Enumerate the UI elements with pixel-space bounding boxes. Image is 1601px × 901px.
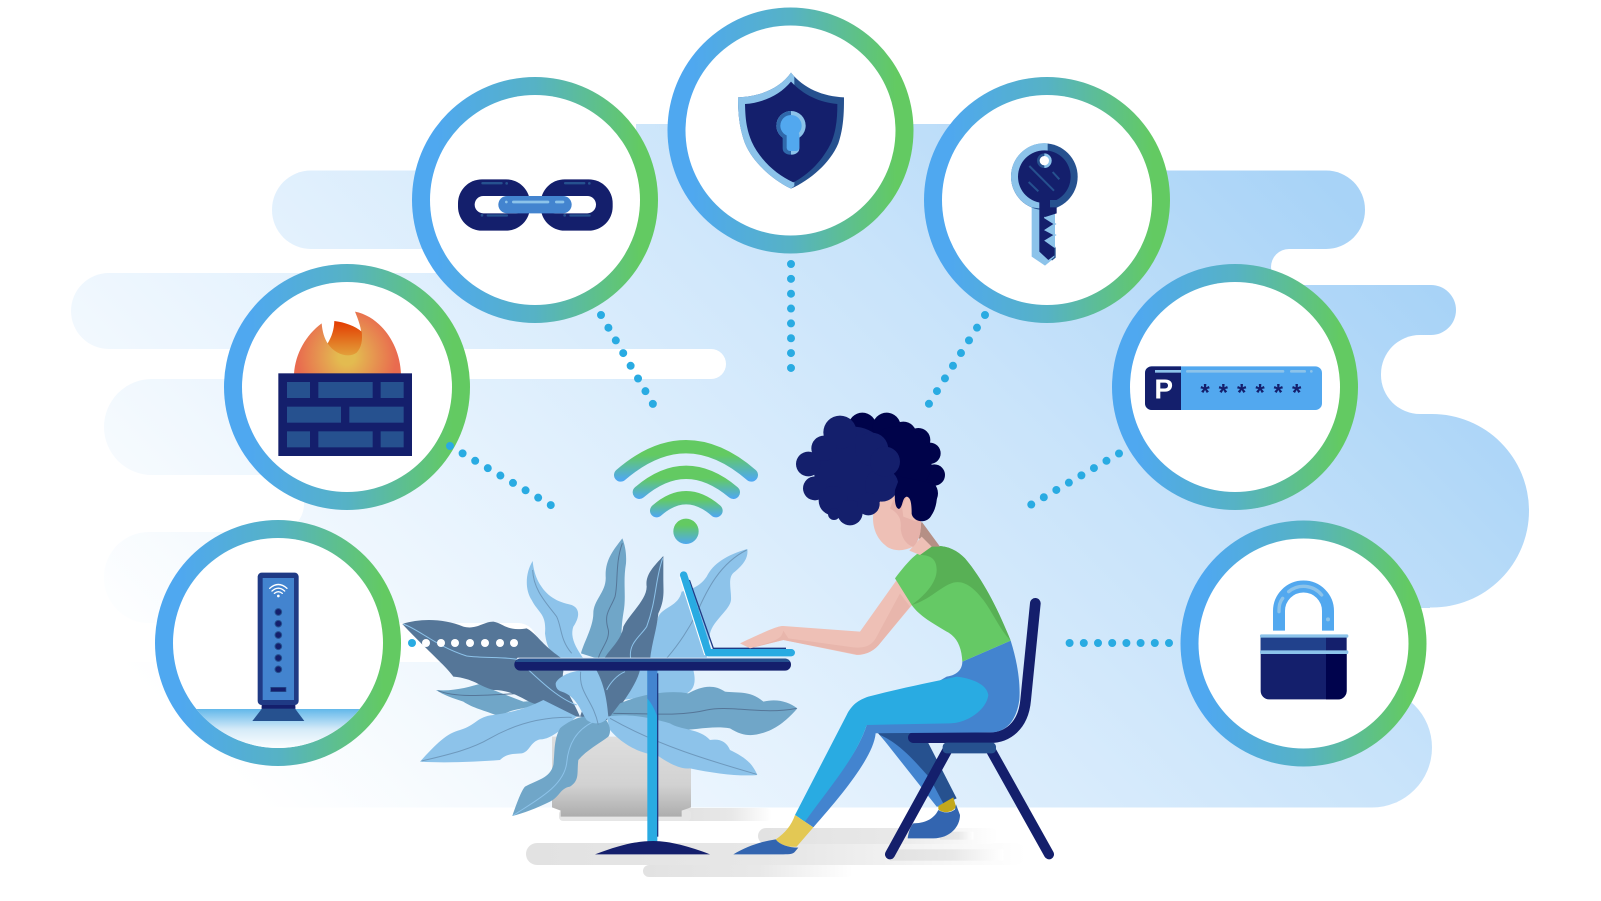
- circle: chain link: [412, 77, 658, 323]
- icon: shield with keyhole: [738, 73, 844, 189]
- icon: key: [1011, 143, 1078, 266]
- dotted connector lines: [450, 264, 1169, 643]
- arm: [740, 580, 913, 655]
- hair back: [848, 413, 945, 507]
- icon: password field: *: [1255, 380, 1265, 407]
- circle: router: [155, 520, 401, 766]
- circle: padlock: [1180, 520, 1426, 766]
- icon: password field: *: [1237, 380, 1247, 407]
- plant leaves: [402, 538, 797, 816]
- circle: password: [1112, 264, 1358, 510]
- icon: password field: *: [1292, 380, 1302, 407]
- table: [514, 658, 791, 854]
- wifi symbol: [621, 447, 751, 544]
- chair: [890, 603, 1049, 854]
- icon: router: [252, 573, 304, 721]
- face: [873, 493, 921, 550]
- router connector dots: [408, 639, 518, 647]
- icon: password field: [1145, 366, 1322, 410]
- circle: firewall: [224, 264, 470, 510]
- laptop: [680, 575, 791, 655]
- icon: flames over brick wall: [278, 312, 412, 456]
- plant pot: [552, 737, 691, 817]
- back leg: [877, 732, 960, 838]
- floor shadows: [526, 808, 1026, 877]
- hips: [867, 641, 1020, 733]
- person at chair: [733, 413, 1049, 861]
- chair shadows: [890, 832, 1003, 861]
- icon: chain link: [458, 179, 613, 231]
- shirt: [895, 546, 1011, 662]
- icon: password field: *: [1219, 380, 1229, 407]
- neck: [909, 522, 940, 555]
- icon: password field: P: [1154, 374, 1173, 405]
- circle: shield: [668, 8, 914, 254]
- icon: password field: *: [1274, 380, 1284, 407]
- circle: key: [924, 77, 1170, 323]
- icon: padlock: [1260, 586, 1348, 699]
- front leg: [733, 677, 988, 854]
- background cloud shape: [0, 124, 1601, 808]
- icon: password field: *: [1200, 380, 1210, 407]
- floor under router: [196, 709, 360, 748]
- hair front: [796, 416, 937, 525]
